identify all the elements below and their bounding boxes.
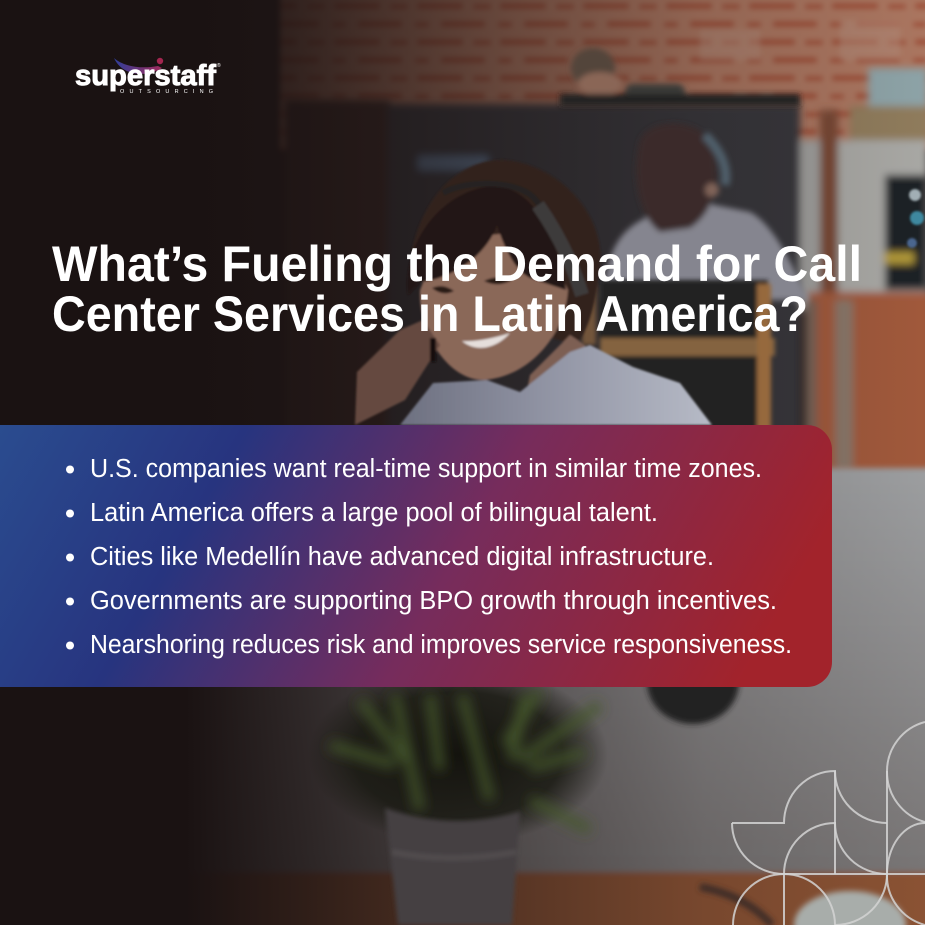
title	[52, 236, 862, 342]
plant foliage shadow	[300, 660, 620, 850]
colleague at rear	[560, 48, 808, 300]
title: Center Services in Latin America?	[52, 286, 808, 342]
coffee mug and cord	[700, 887, 906, 925]
logo dot	[157, 58, 163, 64]
panel: demand drivers list	[0, 425, 832, 687]
logo swoosh	[114, 58, 162, 74]
title: What’s Fueling the Demand for Call	[52, 236, 862, 292]
bullet 1: U.S. companies want real-time support in similar time zones.	[90, 455, 762, 483]
logo wordmark: superstaff	[75, 60, 216, 92]
logo tagline: OUTSOURCING	[120, 89, 213, 95]
bullet 4: Governments are supporting BPO growth through incentives.	[90, 587, 777, 615]
bullet 5: Nearshoring reduces risk and improves service responsiveness.	[90, 631, 792, 659]
geometric line pattern	[732, 722, 925, 925]
plant leaves	[330, 690, 600, 830]
bullet 3: Cities like Medellín have advanced digital infrastructure.	[90, 543, 714, 571]
woman with headset	[355, 160, 712, 425]
monitor light spots	[907, 189, 924, 248]
rear office furniture	[285, 68, 925, 477]
bullet 2: Latin America offers a large pool of bilingual talent.	[90, 499, 658, 527]
brick wall	[280, 0, 925, 150]
gradient panel background	[0, 425, 832, 687]
chair	[582, 280, 775, 434]
logo: superstaff outsourcing	[75, 58, 221, 95]
speaker	[647, 640, 739, 724]
plant pot	[385, 808, 520, 925]
lower wall	[150, 468, 925, 925]
registered mark: ®	[217, 62, 221, 69]
